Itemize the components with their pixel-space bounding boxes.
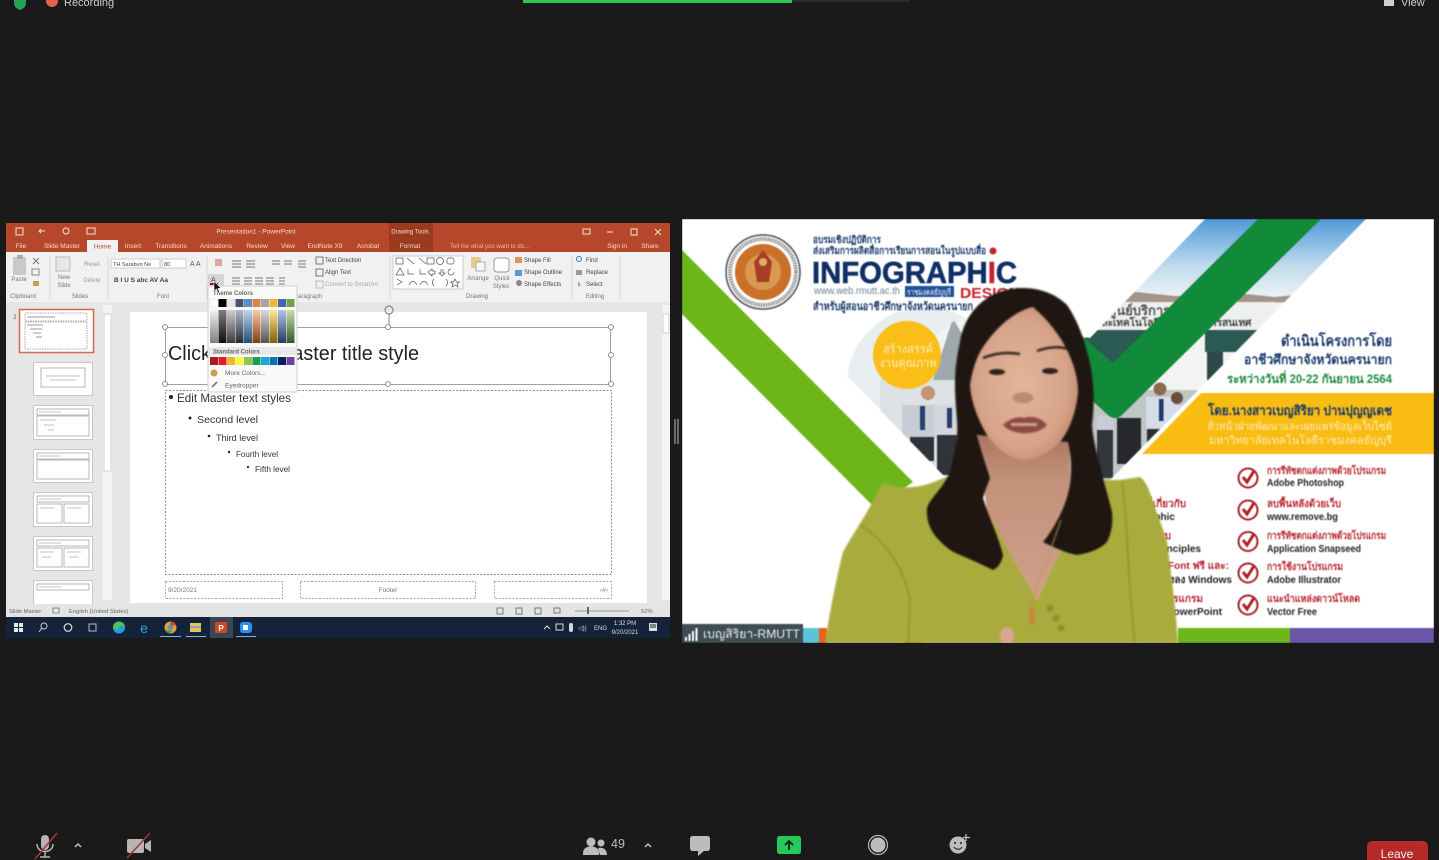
- poster photo of college building: [880, 219, 1366, 480]
- system tray: ◁)): [578, 626, 587, 632]
- participant name tag: [682, 624, 803, 643]
- icon: security shield: [14, 0, 26, 10]
- body placeholder: Third level: [216, 433, 258, 444]
- poster topics list right column: การรีทัชตกแต่งภาพด้วยโปรแกรม: [1267, 529, 1386, 542]
- poster organiser text: [1227, 331, 1392, 386]
- quick access icons: [16, 228, 95, 235]
- font color dropdown: [208, 286, 297, 392]
- top status bar: [14, 0, 1425, 10]
- slide editing canvas: Footer: [379, 587, 398, 594]
- editing group: Select: [586, 282, 603, 288]
- poster topics list left column: PowerPoint: [1167, 607, 1223, 618]
- poster dark green check mark: [1075, 219, 1321, 418]
- poster yellow circle badge: สร้างสรรค์: [883, 342, 933, 356]
- poster photo of college building: สารสนเทศ: [1205, 318, 1252, 329]
- body placeholder: Second level: [197, 414, 258, 426]
- panel: shared PowerPoint screen: [6, 223, 670, 638]
- icon: record: [868, 836, 888, 854]
- icon: stopped video: [127, 833, 151, 858]
- poster yellow circle badge: [873, 321, 941, 389]
- hair: [927, 288, 1112, 570]
- active slide thumbnail: [20, 310, 94, 352]
- status bar: [9, 604, 652, 614]
- drawing group: Styles: [493, 284, 509, 290]
- poster yellow presenter band: [1142, 393, 1434, 454]
- window controls: [583, 229, 661, 235]
- face: [970, 307, 1078, 460]
- ribbon tabs: View: [281, 243, 295, 250]
- paragraph group: Paragraph: [294, 294, 322, 300]
- poster headline: สำหรับผู้สอนอาชีวศึกษาจังหวัดนครนายก: [813, 300, 973, 314]
- editing group: Editing: [586, 294, 604, 300]
- ribbon tabs: Slide Master: [44, 243, 81, 250]
- editing group: Replace: [586, 270, 609, 276]
- slide editing canvas: ‹#›: [600, 587, 608, 594]
- theme colour swatches: [210, 299, 294, 343]
- standard colour swatches: [210, 357, 294, 365]
- poster grey circle: [848, 307, 966, 408]
- poster topics list right column: Vector Free: [1267, 607, 1317, 618]
- font group: A: [211, 277, 216, 284]
- ribbon tabs: Tell me what you want to do...: [450, 244, 529, 250]
- thumbnail pane: 1: [13, 314, 17, 321]
- poster bottom colour bar: [803, 628, 1434, 643]
- ribbon tabs: Insert: [125, 243, 141, 250]
- system tray: 1:32 PM: [614, 621, 636, 627]
- poster topics list right column: Application Snapseed: [1267, 544, 1361, 555]
- poster topics list left column: หลักการออกแบบ: [1098, 530, 1171, 542]
- font color dropdown: Theme Colors: [213, 291, 254, 297]
- poster organiser text: ดำเนินโครงการโดย: [1281, 331, 1392, 350]
- drawing group: Shape Effects: [524, 282, 561, 288]
- ribbon tabs: Sign in: [607, 243, 627, 250]
- ribbon tabs: Format: [400, 243, 420, 250]
- drawing group: [393, 256, 563, 300]
- pane resize handle: [675, 419, 678, 444]
- poster photo of college building: และเทคโนโลยี: [1095, 316, 1159, 329]
- blouse: [825, 476, 1178, 643]
- icon: share screen: [777, 836, 801, 854]
- hand: [1000, 627, 1014, 645]
- blouse buttons: [1046, 604, 1064, 632]
- poster seal logo: [726, 235, 800, 309]
- lips: [1003, 417, 1047, 433]
- poster topics list right column: Adobe Illustrator: [1267, 575, 1341, 586]
- ribbon tabs: EndNote X9: [307, 243, 343, 250]
- paragraph group: Convert to SmartArt: [325, 282, 378, 288]
- font group: TH Sarabun Ne: [113, 262, 151, 268]
- taskbar icons: e: [140, 620, 148, 636]
- clipboard group: Clipboard: [10, 294, 36, 300]
- poster headline: [812, 234, 1020, 314]
- poster headline: ราชมงคลธัญบุรี: [907, 287, 951, 298]
- mouse cursor: [214, 281, 221, 293]
- drawing group: Quick: [494, 276, 511, 282]
- necklace: [989, 510, 1061, 605]
- poster topics list right column: ลบพื้นหลังด้วยเว็บ: [1267, 496, 1341, 510]
- poster yellow circle badge: งานคุณภาพ: [880, 356, 937, 371]
- paragraph group: [232, 257, 378, 300]
- poster topics list right column: Adobe Photoshop: [1267, 478, 1344, 489]
- system tray: [544, 621, 657, 636]
- poster yellow presenter band: มหาวิทยาลัยเทคโนโลยีราชมงคลธัญบุรี: [1209, 433, 1392, 447]
- poster yellow presenter band: หัวหน้าฝ่ายพัฒนาและเผยแพร่ข้อมูลเว็บไซต์: [1207, 419, 1392, 433]
- poster topics list right column: www.remove.bg: [1266, 512, 1338, 523]
- title bar and tabs: Drawing Tools: [391, 230, 429, 236]
- clipboard group: Paste: [11, 277, 27, 283]
- check icons: [1238, 468, 1258, 614]
- poster light green diagonal stripe: [682, 250, 913, 508]
- font group: Font: [157, 294, 169, 300]
- editing group: [576, 256, 609, 300]
- font group: 80: [164, 262, 170, 268]
- slide editing canvas: 9/20/2021: [168, 587, 197, 594]
- taskbar icons: [14, 620, 256, 637]
- ribbon tabs: Acrobat: [357, 243, 379, 250]
- poster topics list left column: Infographic: [1121, 512, 1175, 523]
- right scrollbar: [662, 305, 670, 600]
- clipboard group: [10, 255, 39, 300]
- panel: speaker video: [682, 219, 1434, 645]
- presenter: [825, 288, 1178, 645]
- drawing group: Shape Outline: [524, 270, 563, 276]
- document title: Presentation1 - PowerPoint: [216, 228, 296, 236]
- title bar and tabs: [6, 223, 670, 253]
- people in photo: [902, 382, 1187, 478]
- icon: recording dot: [46, 0, 58, 7]
- ribbon tabs: File: [16, 243, 27, 250]
- slides group: Slide: [57, 283, 71, 289]
- editing group: Find: [586, 258, 598, 264]
- chevron: audio options: [75, 844, 81, 847]
- poster topics list left column: [1098, 496, 1232, 618]
- icon: reactions: [950, 834, 970, 854]
- poster topics list left column: Design Principles: [1117, 544, 1201, 555]
- poster topics list left column: ใช้งานโปรแกรม: [1132, 592, 1203, 605]
- drawing group: Drawing: [466, 294, 488, 300]
- thumbnail pane: [13, 305, 112, 604]
- leave button: [1367, 841, 1428, 860]
- other slide thumbnails: [34, 362, 92, 604]
- poster topics list left column: ความรู้ที่เกี่ยวกับ: [1116, 496, 1186, 511]
- status bar: 52%: [641, 609, 653, 615]
- ribbon tabs: [16, 240, 659, 253]
- slides group: New: [58, 275, 71, 281]
- poster headline: INFOGRAPHIC: [812, 255, 1017, 290]
- body placeholder: Edit Master text styles: [177, 391, 291, 405]
- ribbon tabs: Home: [94, 244, 112, 250]
- body placeholder: Fourth level: [236, 449, 278, 459]
- selected title placeholder: Click to edit Master title style: [168, 343, 419, 365]
- paragraph group: Align Text: [325, 270, 351, 276]
- poster headline: อบรมเชิงปฏิบัติการ: [813, 234, 882, 246]
- poster topics list left column: ติดตั้งลง Windows: [1150, 572, 1232, 586]
- windows taskbar: [6, 617, 670, 638]
- poster headline: DESIGN: [960, 285, 1020, 302]
- status bar: Slide Master: [9, 609, 41, 615]
- system tray: ENG: [594, 626, 607, 632]
- paragraph group: Text Direction: [325, 258, 361, 264]
- blouse seams: [860, 482, 1135, 643]
- poster topics list right column: แนะนำแหล่งดาวน์โหลด: [1267, 592, 1360, 605]
- poster photo of college building: ศูนย์บริการ: [1108, 303, 1170, 319]
- font color dropdown: Standard Colors: [213, 350, 260, 356]
- drawing group: Shape Fill: [524, 258, 551, 264]
- taskbar icons: P: [218, 624, 224, 633]
- poster headline: ส่งเสริมการผลิตสื่อการเรียนการสอนในรูปแบบสื่อ: [813, 243, 986, 258]
- bottom control bar: [35, 833, 1428, 860]
- footer placeholders: [166, 582, 612, 598]
- poster topics list right column: [1238, 464, 1386, 618]
- selected title placeholder: [162, 306, 614, 386]
- icon: muted microphone: [35, 833, 57, 859]
- poster headline: www.web.rmutt.ac.th: [813, 285, 900, 297]
- view button: [1384, 0, 1425, 9]
- poster topics list right column: การใช้งานโปรแกรม: [1267, 560, 1343, 573]
- neck and chest: [977, 430, 1070, 600]
- body placeholder: [166, 390, 612, 574]
- poster topics list right column: การรีทัชตกแต่งภาพด้วยโปรแกรม: [1267, 464, 1386, 477]
- poster yellow presenter band: โดย.นางสาวเบญสิริยา ปานปุญญเดช: [1207, 402, 1392, 419]
- font group: A A: [190, 261, 201, 268]
- body placeholder: Fifth level: [255, 465, 290, 474]
- status bar: English (United States): [69, 609, 128, 615]
- slides group: [56, 257, 101, 300]
- participant name tag: เบญสิริยา-RMUTT: [703, 627, 801, 641]
- font color dropdown: Eyedropper: [225, 382, 259, 390]
- ribbon: [6, 252, 670, 302]
- poster topics list left column: ดาวน์โหลด Font ฟรี และ:: [1116, 559, 1229, 572]
- eyes: [989, 368, 1058, 375]
- slides group: Slides: [72, 294, 88, 300]
- ribbon tabs: Share: [641, 243, 659, 250]
- slides group: Reset: [84, 262, 100, 268]
- nose: [1012, 392, 1034, 403]
- eyebrows: [983, 347, 1068, 358]
- slides group: Delete: [83, 278, 101, 284]
- icon: chat: [690, 836, 710, 856]
- poster organiser text: อาชีวศึกษาจังหวัดนครนายก: [1244, 352, 1392, 367]
- ribbon tabs: Review: [246, 243, 268, 250]
- drawing group: Arrange: [467, 276, 489, 282]
- ribbon tabs: Transitions: [155, 243, 188, 250]
- font group: [111, 259, 224, 300]
- icon: participants with count: [583, 837, 625, 855]
- icon: participants with count: 49: [611, 837, 625, 851]
- font color dropdown: More Colors...: [225, 370, 266, 377]
- chevron: participants options: [645, 844, 651, 847]
- ribbon tabs: Animations: [200, 243, 233, 250]
- poster organiser text: ระหว่างวันที่ 20-22 กันยายน 2564: [1227, 370, 1392, 386]
- font group: B I U S abc AV Aa: [114, 277, 168, 284]
- screen share banner: [523, 0, 910, 3]
- slide editing canvas: [130, 305, 670, 603]
- system tray: 9/20/2021: [612, 630, 639, 636]
